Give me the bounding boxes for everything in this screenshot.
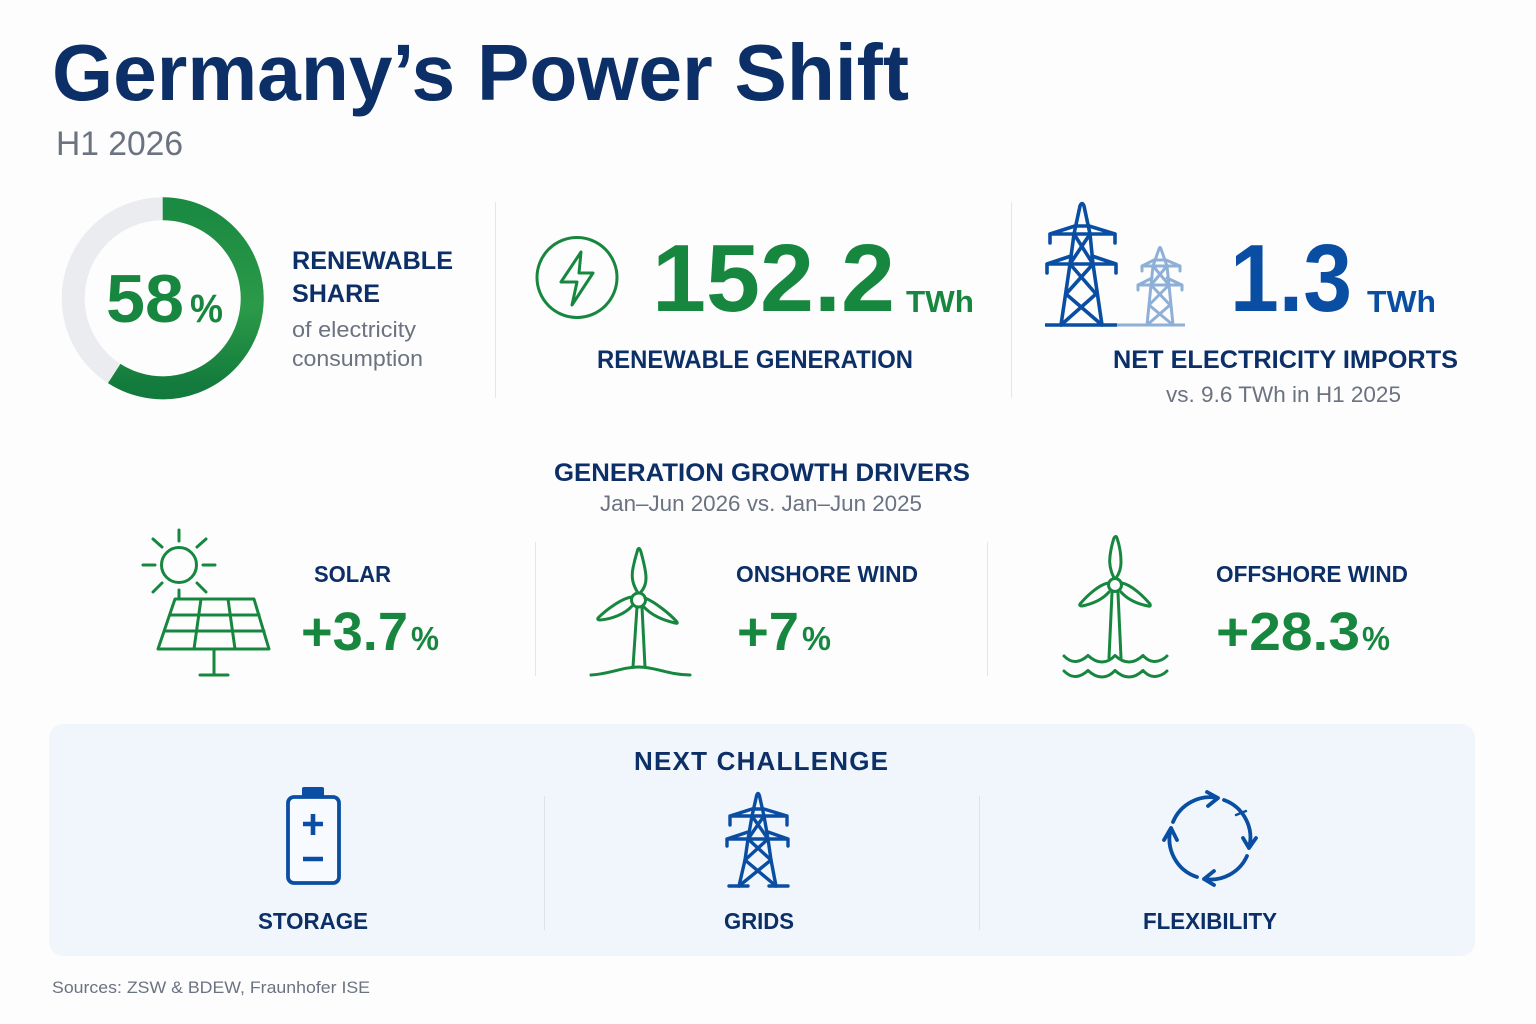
- renewable share label: consumption: [292, 346, 423, 371]
- imports label: vs. 9.6 TWh in H1 2025: [1166, 382, 1401, 407]
- icon: lightning bolt: [537, 238, 617, 318]
- donut value: %: [190, 287, 223, 331]
- title: Germany’s Power Shift: [52, 28, 909, 117]
- donut value: 58: [106, 261, 184, 337]
- heading: next challenge: NEXT CHALLENGE: [634, 746, 888, 776]
- offshore value: %: [1362, 620, 1390, 657]
- renewable share label: [292, 247, 453, 371]
- generation label: RENEWABLE GENERATION: [597, 346, 913, 374]
- onshore value: %: [802, 620, 831, 657]
- storage label: STORAGE: [258, 908, 368, 934]
- grids label: GRIDS: [724, 908, 794, 934]
- imports label: [1113, 346, 1458, 407]
- panel: net imports: [1045, 204, 1458, 407]
- panel: solar: [143, 530, 439, 675]
- icon: onshore turbine: [591, 548, 690, 675]
- flexibility item: [1143, 792, 1277, 934]
- flexibility label: FLEXIBILITY: [1143, 908, 1277, 934]
- onshore label: ONSHORE WIND: [736, 561, 918, 587]
- renewable share label: SHARE: [292, 280, 380, 308]
- panel: onshore wind: [591, 548, 918, 675]
- grids item: [724, 794, 794, 934]
- icon: large pylon: [1045, 204, 1117, 325]
- heading: generation growth drivers: GENERATION GROWTH DRIVERS: [554, 459, 970, 487]
- imports value: [1230, 225, 1436, 332]
- panel: offshore wind: [1064, 536, 1408, 677]
- renewable share label: RENEWABLE: [292, 247, 453, 275]
- imports label: NET ELECTRICITY IMPORTS: [1113, 346, 1458, 374]
- solar value: +3.7: [301, 602, 408, 662]
- panel: renewable share: [73, 209, 453, 388]
- icon: small pylon: [1117, 248, 1185, 325]
- subtitle: H1 2026: [56, 125, 183, 163]
- generation value: 152.2: [652, 225, 895, 332]
- icon: battery: [288, 787, 339, 883]
- icon: cycle arrows: [1164, 792, 1256, 885]
- heading: generation growth drivers: [554, 459, 970, 516]
- heading: generation growth drivers: Jan–Jun 2026 vs. Jan–Jun 2025: [600, 491, 922, 516]
- renewable share label: of electricity: [292, 317, 416, 342]
- panel: renewable generation: [537, 225, 974, 374]
- offshore label: OFFSHORE WIND: [1216, 561, 1408, 587]
- icon: pylon: [727, 794, 788, 886]
- icon: solar panel: [143, 530, 269, 675]
- onshore value: [737, 602, 831, 662]
- panel: next challenge: [49, 724, 1475, 956]
- icon: offshore turbine: [1064, 536, 1167, 677]
- solar value: %: [411, 620, 439, 657]
- solar label: SOLAR: [314, 561, 391, 587]
- imports value: 1.3: [1230, 225, 1352, 332]
- imports value: TWh: [1367, 284, 1436, 319]
- generation value: TWh: [906, 284, 974, 319]
- sources: Sources: ZSW & BDEW, Fraunhofer ISE: [52, 978, 370, 997]
- donut value: [106, 261, 223, 337]
- onshore value: +7: [737, 602, 799, 662]
- donut chart: [73, 209, 252, 388]
- offshore value: +28.3: [1216, 602, 1360, 662]
- storage item: [258, 787, 368, 934]
